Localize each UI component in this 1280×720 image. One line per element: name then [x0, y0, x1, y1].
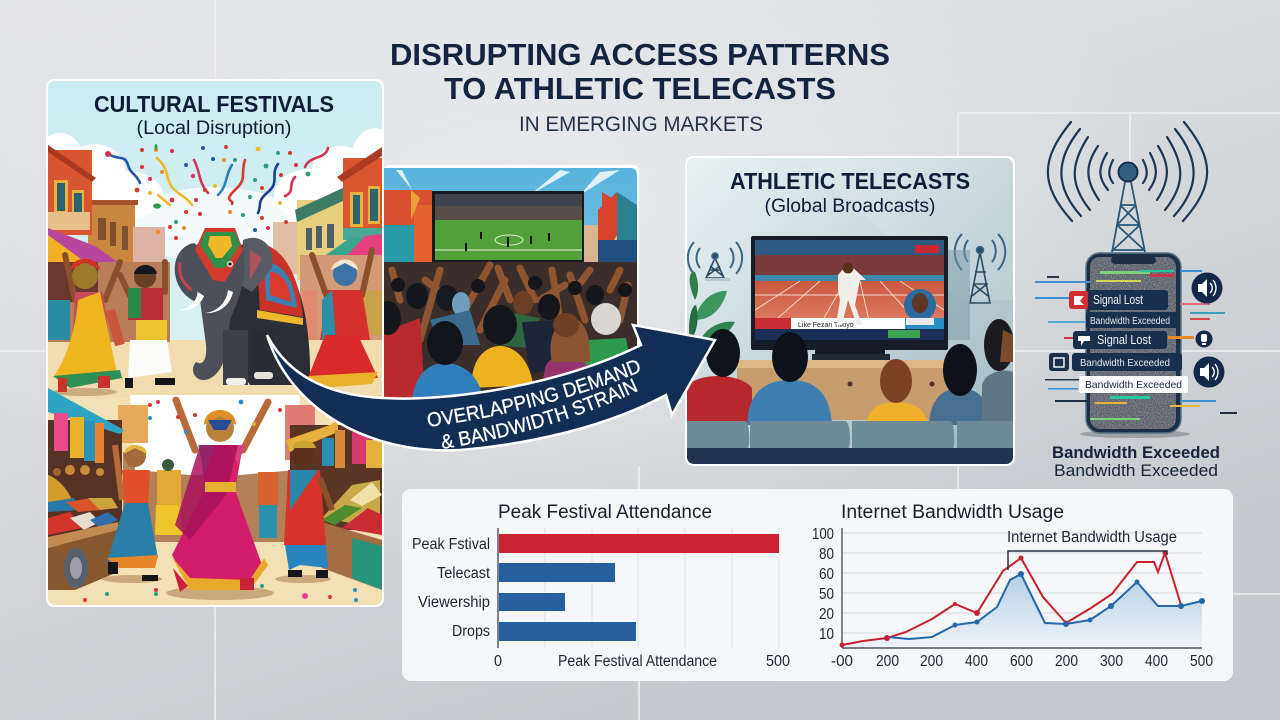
bar chart: peak festival attendance: Peak Fstival: [412, 536, 490, 553]
line chart: internet bandwidth usage: [812, 502, 1213, 670]
television: Like Fezan Tilkiyo: [798, 322, 854, 329]
bar chart: peak festival attendance: Peak Festival Attendance: [498, 502, 712, 523]
line chart: internet bandwidth usage: 300: [1100, 653, 1123, 670]
line chart: internet bandwidth usage: 20: [819, 606, 834, 623]
alerts: signal lost and bandwidth exceeded: Signal Lost: [1097, 333, 1151, 347]
sofa: [687, 421, 1013, 466]
alerts: signal lost and bandwidth exceeded: Bandwidth Exceeded: [1085, 379, 1182, 391]
clouds: [48, 128, 382, 259]
bar chart: peak festival attendance: Peak Festival Attendance: [558, 653, 717, 670]
line chart: internet bandwidth usage: 400: [1145, 653, 1168, 670]
line chart: internet bandwidth usage: 200: [920, 653, 943, 670]
icon: plant: [689, 272, 735, 345]
dancers lower: [102, 400, 332, 600]
bar chart: peak festival attendance: Telecast: [437, 565, 491, 582]
icon: phone with glitching screen: [1080, 253, 1190, 438]
line chart: internet bandwidth usage: 200: [876, 653, 899, 670]
panel: charts: [402, 489, 1233, 681]
ground upper: [48, 340, 382, 400]
heading: cultural festivals: [94, 91, 334, 139]
spectators: [375, 276, 636, 400]
heading: athletic telecasts: [730, 168, 970, 217]
icon: signal tower with waves: [1048, 122, 1207, 252]
banners: [384, 190, 432, 225]
bar chart: peak festival attendance: Viewership: [418, 594, 490, 611]
scattered confetti lower: [83, 400, 358, 602]
panel: cultural festivals: [35, 79, 399, 607]
bar chart: peak festival attendance: [412, 502, 790, 670]
buildings right: [273, 147, 382, 345]
panel: crowd watching big screen: [384, 165, 639, 398]
line chart: internet bandwidth usage: 600: [1010, 653, 1033, 670]
line chart: internet bandwidth usage: 50: [819, 586, 834, 603]
arrow: overlapping demand and bandwidth strain: OVERLAPPING DEMAND: [428, 360, 640, 426]
heading: athletic telecasts: (Global Broadcasts): [764, 196, 936, 217]
elephant: [175, 228, 310, 385]
heading: cultural festivals: CULTURAL FESTIVALS: [94, 91, 334, 117]
line chart: internet bandwidth usage: Internet Bandwidth Usage: [841, 502, 1064, 523]
bar chart: peak festival attendance: 0: [494, 653, 502, 670]
icon: right broadcast tower: [955, 234, 1005, 303]
line chart: internet bandwidth usage: 10: [819, 626, 834, 643]
title: [390, 37, 890, 136]
cabinet: [737, 368, 949, 420]
arrow: overlapping demand and bandwidth strain: [266, 323, 717, 452]
arrow: overlapping demand and bandwidth strain: & BANDWIDTH STRAIN: [442, 378, 638, 449]
line chart: internet bandwidth usage: 400: [965, 653, 988, 670]
title: IN EMERGING MARKETS: [519, 113, 763, 136]
caption: bandwidth exceeded: Bandwidth Exceeded: [1054, 461, 1218, 480]
icon: speakers: [1192, 272, 1224, 388]
heading: athletic telecasts: ATHLETIC TELECASTS: [730, 168, 970, 194]
crowd background: [384, 262, 637, 391]
alerts: signal lost and bandwidth exceeded: Bandwidth Exceeded: [1090, 316, 1170, 327]
line chart: internet bandwidth usage: -00: [831, 653, 853, 670]
caption: bandwidth exceeded: Bandwidth Exceeded: [1052, 443, 1220, 462]
alerts: signal lost and bandwidth exceeded: Bandwidth Exceeded: [1080, 358, 1170, 369]
buildings left: [48, 145, 165, 262]
big screen: [432, 191, 584, 263]
line chart: internet bandwidth usage: 200: [1055, 653, 1078, 670]
dancers upper: [48, 250, 378, 396]
bar chart: peak festival attendance: Drops: [452, 623, 490, 640]
viewers: [686, 319, 1014, 425]
market street lower: [48, 388, 382, 605]
line chart: internet bandwidth usage: 60: [819, 566, 834, 583]
alerts: signal lost and bandwidth exceeded: [1049, 290, 1188, 393]
line chart: internet bandwidth usage: Internet Bandwidth Usage: [1007, 529, 1177, 546]
bar chart: peak festival attendance: 500: [766, 653, 790, 670]
caption: bandwidth exceeded: [1052, 443, 1220, 480]
alerts: signal lost and bandwidth exceeded: Signal Lost: [1093, 293, 1143, 307]
line chart: internet bandwidth usage: 80: [819, 546, 834, 563]
icon: left broadcast tower: [688, 242, 742, 281]
title: DISRUPTING ACCESS PATTERNS: [390, 37, 890, 72]
title: TO ATHLETIC TELECASTS: [444, 71, 836, 106]
line chart: internet bandwidth usage: 100: [812, 526, 834, 543]
line chart: internet bandwidth usage: 500: [1190, 653, 1213, 670]
glitch streaks: [1035, 270, 1237, 414]
television: [751, 236, 970, 360]
heading: cultural festivals: (Local Disruption): [136, 118, 292, 139]
panel: athletic telecasts: [685, 156, 1015, 466]
confetti: [110, 148, 328, 213]
